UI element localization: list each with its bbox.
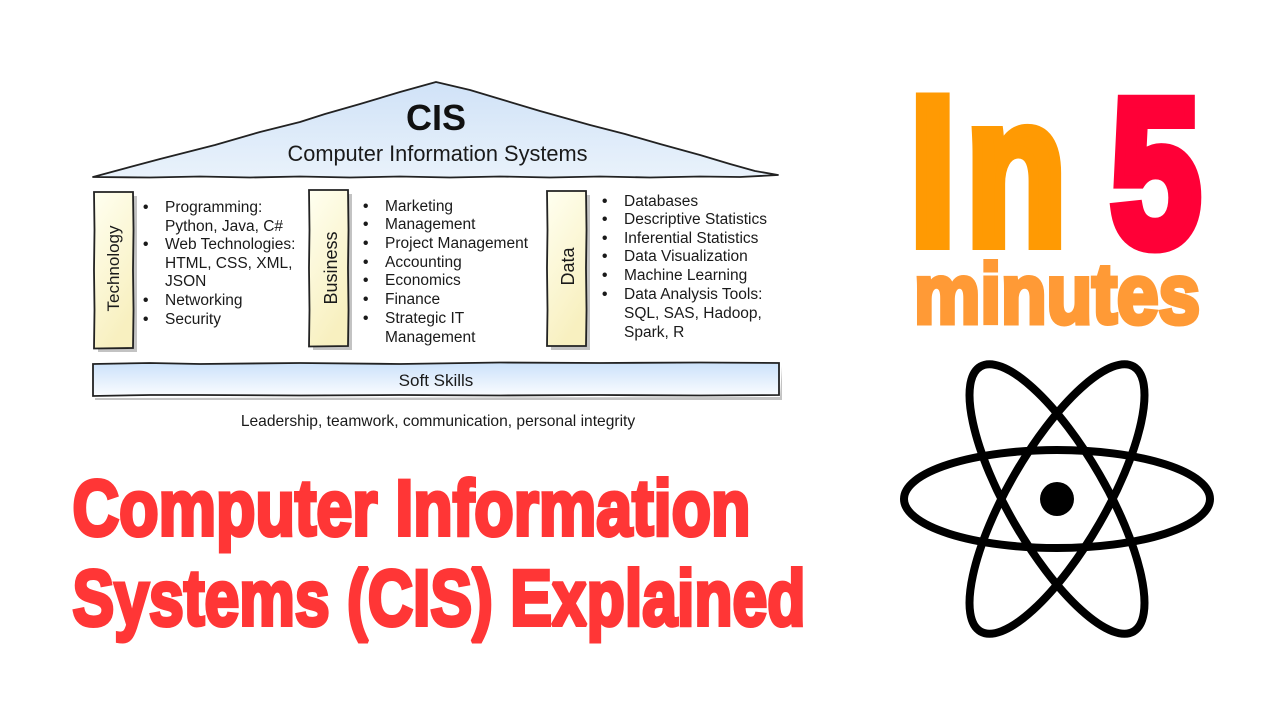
foundation: Soft Skills xyxy=(93,362,782,400)
5: 5 xyxy=(1110,57,1201,290)
list: Technology topics: HTML, CSS, XML, xyxy=(165,255,292,272)
list: Data topics: Descriptive Statistics xyxy=(624,211,767,228)
main title xyxy=(72,463,806,642)
list: Business topics: • xyxy=(363,235,368,252)
list: Business topics: • xyxy=(363,254,368,271)
list: Technology topics: • xyxy=(143,292,148,309)
icon: atom xyxy=(904,342,1210,656)
list: Data topics: • xyxy=(602,286,607,303)
list: Technology topics: • xyxy=(143,236,148,253)
list: Data topics xyxy=(602,193,767,341)
list: Business topics: Management xyxy=(385,216,476,233)
list: Data topics: Data Visualization xyxy=(624,248,748,265)
list: Technology topics: • xyxy=(143,311,148,328)
list: Business topics: Project Management xyxy=(385,235,529,252)
list: Data topics: • xyxy=(602,230,607,247)
list: Data topics: • xyxy=(602,248,607,265)
list: Data topics: Databases xyxy=(624,193,698,210)
pillar: Data: Data xyxy=(558,247,578,286)
list: Data topics: SQL, SAS, Hadoop, xyxy=(624,305,762,322)
roof title: CIS: CIS xyxy=(406,97,466,138)
main title: Computer Information xyxy=(72,463,750,552)
list: Technology topics xyxy=(143,199,295,328)
list: Business topics: Economics xyxy=(385,272,461,289)
list: Business topics: • xyxy=(363,291,368,308)
list: Technology topics: Web Technologies: xyxy=(165,236,295,253)
soft skills caption: Leadership, teamwork, communication, personal integrity xyxy=(241,413,635,430)
pillar: Business xyxy=(309,190,352,350)
list: Data topics: Inferential Statistics xyxy=(624,230,759,247)
In: In xyxy=(910,54,1066,288)
list: Data topics: Spark, R xyxy=(624,324,684,341)
minutes: minutes xyxy=(914,247,1200,341)
list: Business topics: Strategic IT xyxy=(385,310,465,327)
list: Technology topics: Networking xyxy=(165,292,243,309)
list: Data topics: • xyxy=(602,193,607,210)
list: Business topics: Marketing xyxy=(385,198,453,215)
list: Business topics: • xyxy=(363,216,368,233)
list: Business topics: • xyxy=(363,198,368,215)
list: Technology topics: JSON xyxy=(165,273,206,290)
diagram: CIS house xyxy=(93,82,782,430)
pillar: Business: Business xyxy=(321,231,341,305)
list: Business topics: Finance xyxy=(385,291,440,308)
pillar: Data xyxy=(547,191,590,350)
main title: Systems (CIS) Explained xyxy=(72,553,806,642)
list: Technology topics: Programming: xyxy=(165,199,262,216)
roof xyxy=(93,82,778,178)
list: Business topics xyxy=(363,198,529,346)
list: Data topics: • xyxy=(602,211,607,228)
list: Data topics: • xyxy=(602,267,607,284)
list: Data topics: Machine Learning xyxy=(624,267,747,284)
list: Data topics: Data Analysis Tools: xyxy=(624,286,762,303)
list: Business topics: Management xyxy=(385,329,476,346)
foundation: Soft Skills: Soft Skills xyxy=(399,371,473,390)
list: Technology topics: Python, Java, C# xyxy=(165,218,283,235)
list: Technology topics: • xyxy=(143,199,148,216)
roof subtitle: Computer Information Systems xyxy=(288,141,588,166)
pillar: Technology: Technology xyxy=(104,225,123,312)
list: Technology topics: Security xyxy=(165,311,221,328)
list: Business topics: • xyxy=(363,272,368,289)
list: Business topics: • xyxy=(363,310,368,327)
list: Business topics: Accounting xyxy=(385,254,462,271)
pillar: Technology xyxy=(94,192,137,352)
badge: In 5 minutes xyxy=(910,54,1201,341)
